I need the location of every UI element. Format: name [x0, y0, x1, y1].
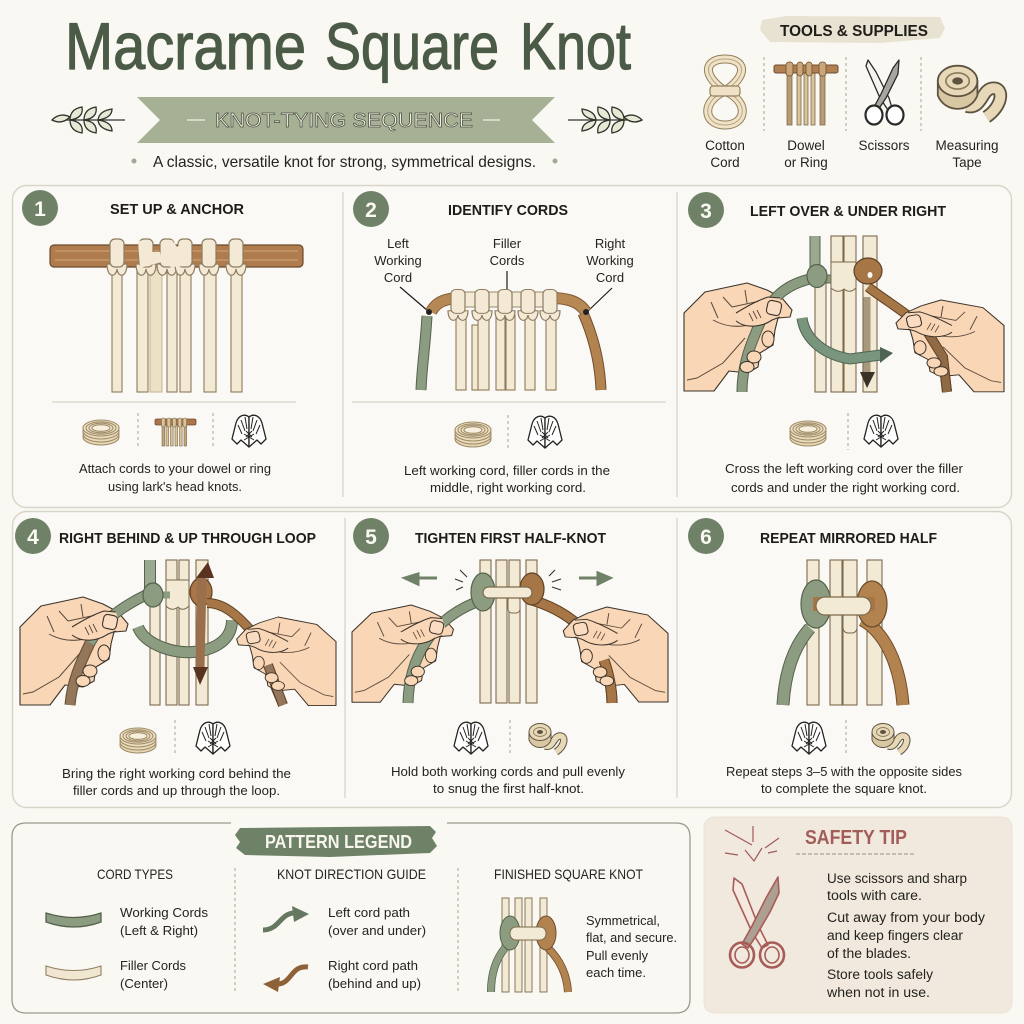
step 1 caption: using lark's head knots. [108, 479, 242, 494]
panel: safety tip [704, 817, 1012, 1013]
legend: finished square knot [491, 866, 677, 992]
tool labels: Cotton [705, 138, 745, 153]
step 6 caption: to complete the square knot. [761, 781, 927, 796]
step 2 labels: Cord [596, 270, 624, 285]
step 3 badge: 3 [700, 200, 712, 223]
icon: cotton cord [708, 59, 742, 125]
legend: cord types: (Center) [120, 976, 168, 991]
step 1 illustration [50, 239, 303, 392]
step 2 caption: Left working cord, filler cords in the [404, 463, 610, 478]
step 4 icons [120, 720, 230, 755]
step 1 icons [83, 413, 266, 447]
step 2 labels: Left [387, 236, 409, 251]
banner: knot-tying sequence: KNOT-TYING SEQUENCE [215, 110, 473, 132]
title: Knot [520, 9, 631, 83]
step 1 heading: SET UP & ANCHOR [110, 201, 244, 218]
tools heading [760, 16, 945, 43]
step 5 caption: Hold both working cords and pull evenly [391, 764, 625, 779]
step 4 badge: 4 [27, 526, 39, 549]
safety sparks icon [725, 826, 779, 861]
subtitle: A classic, versatile knot for strong, symmetrical designs. [153, 154, 536, 171]
panel: step 6 [688, 518, 962, 796]
legend: cord types: CORD TYPES [97, 866, 173, 882]
legend heading [235, 826, 437, 857]
safety text [826, 871, 985, 1000]
legend: knot direction guide: (over and under) [328, 923, 426, 938]
step 6 heading: REPEAT MIRRORED HALF [760, 530, 937, 547]
arrow: pull right [579, 573, 610, 584]
tool labels: Measuring [935, 138, 999, 153]
step 1 caption [79, 461, 271, 494]
panel: step 2 [353, 191, 634, 495]
legend: knot direction guide: (behind and up) [328, 976, 421, 991]
title: Macrame [65, 9, 306, 83]
step 6 badge [688, 518, 724, 554]
safety text: Use scissors and sharp [827, 871, 967, 886]
title: Square [325, 9, 499, 83]
step 3 caption [725, 461, 964, 495]
step 1 badge: 1 [34, 198, 46, 221]
step 2 labels [374, 236, 634, 312]
step 5 illustration [352, 560, 668, 703]
step 3 badge [688, 192, 724, 228]
step 5 icons [454, 720, 564, 755]
safety text: when not in use. [826, 985, 930, 1000]
step 4 caption [62, 766, 291, 798]
legend: knot direction guide: Left cord path [328, 905, 410, 920]
step 2 icons [455, 415, 562, 450]
step 2 labels: Cords [490, 253, 525, 268]
step 2 labels: Right [595, 236, 626, 251]
panel: steps row 1 frame [12, 186, 1012, 508]
step 6 caption: Repeat steps 3–5 with the opposite sides [726, 764, 962, 779]
tool labels: Dowel [787, 138, 825, 153]
panel: step 3 [684, 192, 1004, 495]
arrow: pull left [405, 574, 437, 584]
step 3 caption: cords and under the right working cord. [731, 480, 960, 495]
legend: cord types [46, 866, 209, 991]
step 5 heading: TIGHTEN FIRST HALF-KNOT [415, 530, 606, 547]
step 2 heading: IDENTIFY CORDS [448, 202, 568, 219]
step 2 badge [353, 191, 389, 227]
legend: finished square knot: each time. [586, 965, 646, 980]
step 4 caption: Bring the right working cord behind the [62, 766, 291, 781]
step 5 badge [353, 518, 389, 554]
step 4 badge [15, 518, 51, 554]
legend: knot direction guide [263, 866, 426, 992]
tool labels: Scissors [858, 138, 910, 153]
step 2 caption [404, 463, 610, 495]
safety text: tools with care. [827, 888, 922, 903]
icon: measuring tape [938, 66, 1000, 117]
tool labels: Cord [710, 155, 740, 170]
panel: steps row 2 frame [12, 512, 1012, 808]
step 2 labels: Working [586, 253, 634, 268]
legend: knot direction guide: Right cord path [328, 958, 418, 973]
step 1 badge [22, 190, 58, 226]
tool labels: or Ring [784, 155, 828, 170]
title [65, 9, 631, 83]
legend: finished square knot: Symmetrical, [586, 913, 660, 928]
panel: step 5 [352, 518, 668, 796]
panel: step 1 [22, 190, 303, 494]
tool labels [705, 138, 999, 170]
step 3 caption: Cross the left working cord over the filler [725, 461, 964, 476]
legend: cord types: (Left & Right) [120, 923, 198, 938]
legend: knot direction guide: KNOT DIRECTION GUIDE [277, 866, 426, 882]
icon: safety scissors [730, 877, 784, 968]
step 5 caption: to snug the first half-knot. [433, 781, 584, 796]
safety text: Store tools safely [827, 967, 933, 982]
step 2 illustration [421, 290, 601, 390]
tool dividers [764, 57, 921, 131]
step 6 illustration [783, 560, 903, 705]
step 2 labels: Cord [384, 270, 412, 285]
step 6 badge: 6 [700, 526, 712, 549]
icon: left sprig [52, 107, 125, 133]
safety text: of the blades. [827, 946, 911, 961]
panel: pattern legend [12, 823, 690, 1013]
step 1 caption: Attach cords to your dowel or ring [79, 461, 271, 476]
step 6 caption [726, 764, 962, 796]
safety text: and keep fingers clear [827, 928, 964, 943]
icon: right sprig [568, 107, 642, 133]
step 6 icons [792, 720, 907, 755]
banner: knot-tying sequence [137, 97, 555, 143]
legend: finished square knot: Pull evenly [586, 948, 648, 963]
step 4 caption: filler cords and up through the loop. [73, 783, 280, 798]
step 2 caption: middle, right working cord. [430, 480, 586, 495]
step 3 illustration [684, 236, 1004, 392]
safety text: Cut away from your body [827, 910, 985, 925]
step 5 tension marks [455, 570, 561, 590]
legend: finished square knot: flat, and secure. [586, 930, 677, 945]
legend: cord types: Filler Cords [120, 958, 186, 973]
step 3 heading: LEFT OVER & UNDER RIGHT [750, 203, 946, 220]
step 2 badge: 2 [365, 199, 377, 222]
tools heading: TOOLS & SUPPLIES [780, 23, 928, 40]
safety heading: SAFETY TIP [805, 827, 907, 849]
step 2 labels: Filler [493, 236, 522, 251]
step 5 caption [391, 764, 625, 796]
legend: cord types: Working Cords [120, 905, 209, 920]
step 2 labels: Working [374, 253, 422, 268]
legend heading: PATTERN LEGEND [265, 832, 412, 852]
icon: dowel [774, 62, 838, 125]
step 5 badge: 5 [365, 526, 377, 549]
icon: scissors [866, 60, 904, 124]
tool labels: Tape [952, 155, 982, 170]
panel: step 4 [15, 518, 336, 798]
legend: finished square knot: FINISHED SQUARE KNOT [494, 866, 643, 882]
step 3 icons [790, 413, 898, 450]
step 4 heading: RIGHT BEHIND & UP THROUGH LOOP [59, 530, 316, 547]
step 4 illustration [20, 560, 336, 706]
